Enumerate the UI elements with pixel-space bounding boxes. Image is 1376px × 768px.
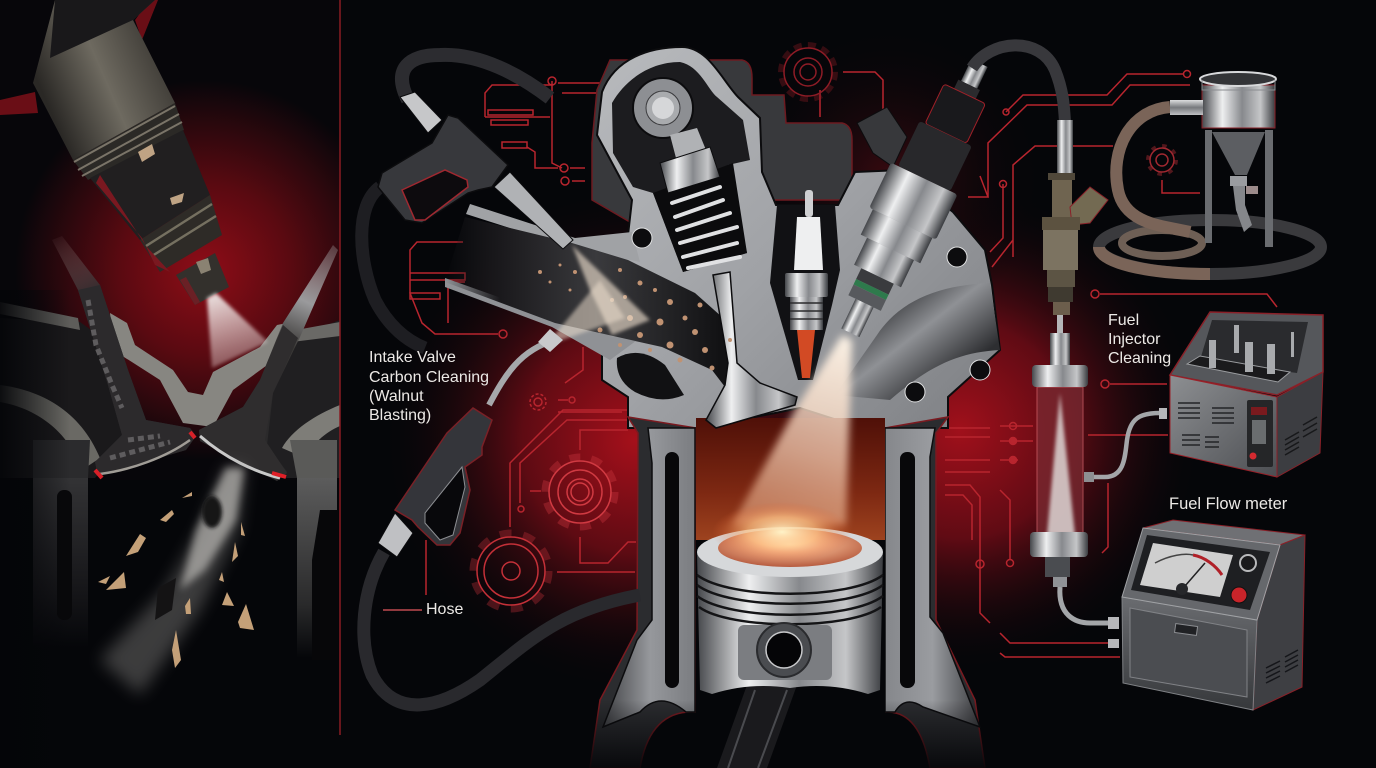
spark plug cavity [770,205,840,380]
bore [696,418,885,553]
panel: carbon build-up close-up [0,0,340,768]
port lower strip [445,278,640,360]
left wall [590,417,696,768]
dirty nozzle [33,0,229,305]
debris plume [100,466,246,695]
spring back [653,163,747,272]
gear: top [781,45,835,99]
right wall [885,417,985,768]
fuel injector [817,45,1065,349]
intake valve [706,272,797,428]
silver head casting [560,47,1000,428]
piston [697,527,883,694]
lower left slot [617,353,684,399]
dark block behind head [592,60,852,225]
top bands [0,302,80,330]
connector [857,107,907,167]
connector [1170,100,1203,115]
engine head [445,47,1000,428]
gear: right [1148,146,1176,174]
left edge fade [0,290,70,768]
label: Fuel Injector Cleaning: Injector [1108,331,1161,348]
right port [835,283,1000,400]
hose [972,45,1065,122]
spark plug [785,190,828,378]
funnel blasting media hopper [1099,72,1321,274]
knob and spring cavity [612,62,750,272]
port arcs [0,385,100,470]
walnut particles [538,264,732,370]
label: Fuel Injector Cleaning: Cleaning [1108,350,1171,367]
label: Intake Valve Carbon Cleaning: Carbon Cleaning [369,369,489,386]
right valve [199,245,338,481]
gear: middle [545,457,615,527]
valve seat head band [110,313,287,427]
label: Fuel Injector Cleaning: Fuel [1108,312,1139,329]
fuel line and brass inline injector [1042,120,1108,333]
upper blasting gun and hose [362,55,573,348]
cone [1212,132,1265,175]
connecting rod [717,685,797,768]
legs [1205,130,1212,243]
label: Intake Valve Carbon Cleaning: Intake Valve [369,349,456,366]
bottom fade [585,700,990,768]
red reflection shapes [0,0,158,115]
panel divider [339,0,341,735]
lower wall pieces [33,440,90,478]
injector cleaning machine [1170,312,1323,477]
port upper strip [466,204,640,262]
gear: lower [473,533,549,609]
red background glows [341,30,1220,710]
hose ring [1099,220,1321,274]
retainer [660,147,720,193]
carbon chips [98,492,254,668]
coils [672,187,740,268]
nozzle spray [207,293,268,368]
injector spray [712,335,852,562]
cylinder block [585,417,990,768]
circuit traces [383,70,1277,657]
label: Fuel Flow meter: Fuel Flow meter [1169,495,1288,513]
lower blasting gun and hose [364,329,640,705]
valve [1230,176,1247,186]
left carbon-covered valve [52,236,196,478]
label: Intake Valve Carbon Cleaning: (Walnut [369,388,424,405]
body [1202,85,1275,128]
dark port area left [0,318,130,478]
label: Intake Valve Carbon Cleaning: Blasting) [369,407,431,424]
valve spring assembly [633,78,747,272]
walnut spray cones [552,245,650,342]
glass flow cylinder [1030,333,1167,648]
rocker eye [633,78,693,138]
fuel flow meter [1122,520,1305,710]
head bolt holes [632,228,990,402]
intake port [445,217,735,400]
dark port area right [250,320,340,478]
label: Hose: Hose [426,601,463,618]
